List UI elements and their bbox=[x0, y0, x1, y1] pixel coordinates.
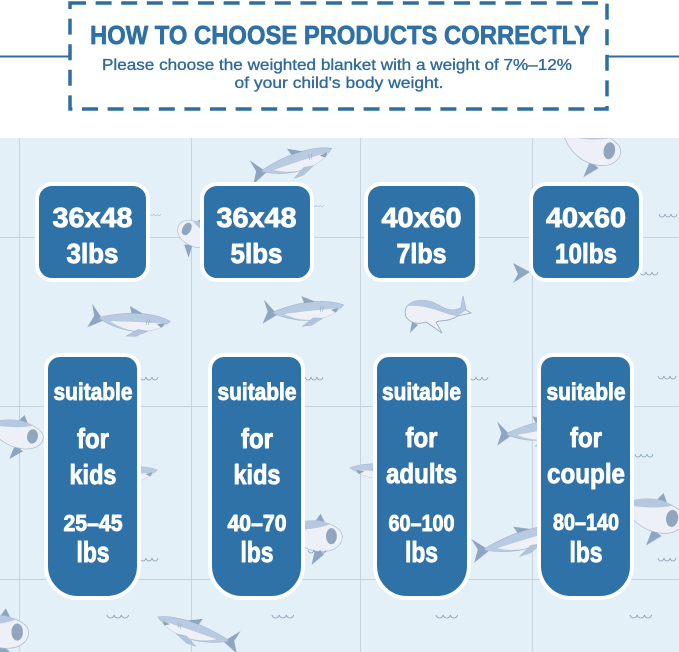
size card: 40x60 7lbs: 40x60 bbox=[382, 202, 462, 233]
suitability pill: adults 60-100 lbs bbox=[375, 355, 469, 598]
suitability pill: kids 25-45 lbs: kids bbox=[70, 459, 116, 490]
suitability pill: couple 80-140 lbs: for bbox=[570, 422, 602, 453]
title: HOW TO CHOOSE PRODUCTS CORRECTLY bbox=[90, 20, 590, 50]
size card: 40x60 10lbs: 40x60 bbox=[546, 202, 626, 233]
suitability pill: adults 60-100 lbs: 60–100 bbox=[388, 510, 454, 536]
suitability pill: couple 80-140 lbs: lbs bbox=[570, 537, 602, 569]
suitability pill: kids 40-70 lbs: kids bbox=[234, 459, 280, 490]
suitability pill: kids 25-45 lbs: lbs bbox=[76, 537, 110, 569]
suitability pill: kids 25-45 lbs: for bbox=[77, 423, 109, 454]
header connector line right bbox=[607, 56, 679, 58]
panel: header bbox=[0, 3, 679, 109]
size card: 36x48 3lbs bbox=[37, 184, 148, 280]
suitability pill: couple 80-140 lbs: 80–140 bbox=[553, 509, 619, 535]
suitability pill: adults 60-100 lbs: for bbox=[406, 422, 438, 453]
size card: 40x60 10lbs: 10lbs bbox=[555, 238, 617, 269]
suitability pill: kids 40-70 lbs: suitable bbox=[218, 379, 296, 406]
subtitle: of your child's body weight. bbox=[234, 75, 444, 92]
subtitle: Please choose the weighted blanket with a weight of 7%–12% bbox=[102, 57, 572, 74]
suitability pill: kids 40-70 lbs: for bbox=[241, 423, 273, 454]
size card: 36x48 3lbs: 36x48 bbox=[52, 202, 132, 233]
size card: 36x48 5lbs bbox=[202, 184, 312, 280]
suitability pill: adults 60-100 lbs: lbs bbox=[405, 537, 438, 569]
suitability pill: kids 25-45 lbs: 25–45 bbox=[64, 510, 123, 536]
suitability pill: adults 60-100 lbs: adults bbox=[386, 458, 457, 489]
suitability pill: kids 40-70 lbs: lbs bbox=[240, 537, 274, 569]
size card: 36x48 5lbs: 5lbs bbox=[230, 238, 282, 269]
size card: 36x48 3lbs: 3lbs bbox=[66, 238, 118, 269]
suitability pill: kids 25-45 lbs: suitable bbox=[54, 379, 132, 406]
header connector line left bbox=[0, 56, 69, 58]
suitability pill: couple 80-140 lbs bbox=[539, 355, 632, 598]
size card: 36x48 5lbs: 36x48 bbox=[216, 202, 296, 233]
suitability pill: kids 40-70 lbs: 40–70 bbox=[228, 510, 286, 536]
grid lines bbox=[0, 138, 679, 652]
size card: 40x60 10lbs bbox=[531, 184, 641, 280]
size card: 40x60 7lbs bbox=[366, 184, 477, 280]
suitability pill: kids 40-70 lbs bbox=[210, 355, 303, 598]
suitability pill: adults 60-100 lbs: suitable bbox=[382, 379, 461, 406]
suitability pill: couple 80-140 lbs: couple bbox=[547, 458, 625, 489]
size card: 40x60 7lbs: 7lbs bbox=[396, 238, 446, 269]
suitability pill: couple 80-140 lbs: suitable bbox=[546, 379, 626, 406]
suitability pill: kids 25-45 lbs bbox=[46, 355, 139, 598]
waves bbox=[107, 205, 677, 618]
subtitle bbox=[102, 57, 572, 92]
dashed header frame bbox=[70, 3, 607, 109]
